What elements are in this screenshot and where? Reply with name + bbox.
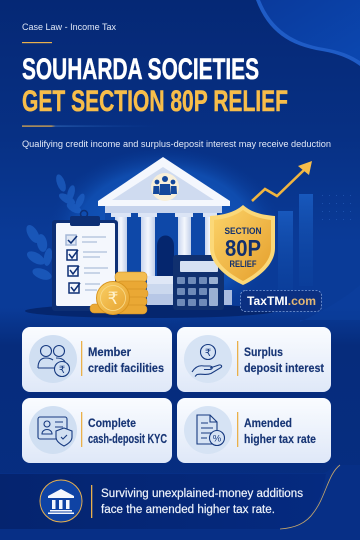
card: surplus deposit interest: deposit interest [244,361,324,375]
kicker rule [22,42,52,43]
badge: section 80P relief shield [210,205,275,285]
icon: rupee coins: ₹ [108,289,118,308]
footer text [101,488,303,516]
badge: section 80P relief shield: 80P [225,235,261,261]
card: amended higher tax rate: higher tax rate [244,432,316,446]
card: amended higher tax rate [177,398,331,463]
kicker: Case Law - Income Tax [22,22,116,32]
card: amended higher tax rate: Amended [244,416,292,430]
icon: id card with shield [38,417,72,446]
title [22,53,288,118]
icon: document with percent: % [213,434,222,444]
card: member credit facilities: credit facilities [88,361,164,375]
footer banner [0,465,360,540]
card: complete cash-deposit KYC: cash-deposit KYC [88,432,167,446]
icon: hand with rupee: ₹ [205,348,211,359]
ground shadow [25,304,275,318]
decorative dots [322,195,351,220]
bar chart [278,194,313,291]
growth arrow [252,161,312,201]
icon: members with rupee [38,346,70,376]
icon: members medallion [151,173,179,201]
title rule [22,126,162,127]
icon: hand with rupee [192,344,222,376]
icon: rupee coins [90,272,148,314]
card: complete cash-deposit KYC: Complete [88,416,136,430]
icon: clipboard checklist [52,210,118,311]
card: member credit facilities: Member [88,345,131,359]
icon: members with rupee: ₹ [59,365,65,376]
badge: section 80P relief shield: RELIEF [230,259,257,269]
icon: calculator [173,255,224,310]
card: complete cash-deposit KYC [22,398,172,463]
card: member credit facilities [22,327,172,392]
icon: bank building [98,157,232,305]
badge: section 80P relief shield: SECTION [224,226,262,237]
subtitle: Qualifying credit income and surplus-deposit interest may receive deduction [22,139,331,150]
icon: document with percent [197,415,224,446]
illustration: leaves [24,173,87,282]
footer text: face the amended higher tax rate. [101,504,275,516]
logo badge: TaxTMI.com [247,296,316,308]
logo badge [240,290,322,312]
card: surplus deposit interest [177,327,331,392]
footer text: Surviving unexplained-money additions [101,488,303,500]
card: surplus deposit interest: Surplus [244,345,283,359]
title: SOUHARDA SOCIETIES [22,53,259,86]
icon: footer bank [40,480,82,522]
